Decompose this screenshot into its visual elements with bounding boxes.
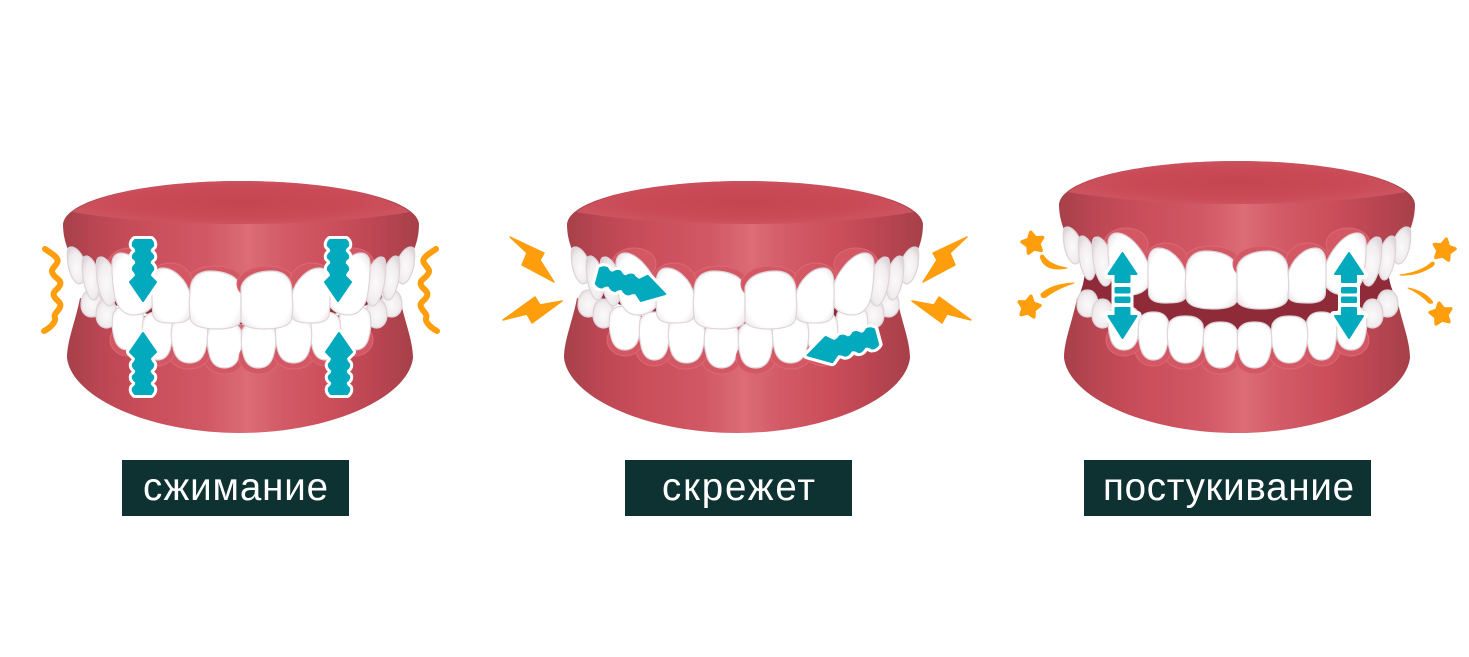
icon: bolt lower left <box>503 297 562 323</box>
icon: star lower left <box>1017 294 1041 318</box>
lower teeth <box>1077 290 1398 374</box>
arrow: up left <box>130 333 156 394</box>
icon: impact strokes <box>1040 255 1434 303</box>
arrow: grinding left <box>804 324 879 368</box>
panel: сжимание <box>44 181 437 516</box>
icon: star lower right <box>1429 301 1453 325</box>
label: сжимание <box>122 460 349 516</box>
icon: star upper right <box>1432 237 1457 261</box>
upper gum <box>63 181 419 298</box>
lower teeth <box>81 290 402 374</box>
arrow: down left <box>130 240 156 301</box>
label: постукивание: постукивание <box>1103 466 1354 509</box>
arrow: up right <box>326 333 352 394</box>
label: скрежет: скрежет <box>662 466 815 509</box>
label: скрежет <box>625 460 852 516</box>
mouth gap <box>100 296 382 320</box>
arrow: down right <box>325 240 351 301</box>
arrow: grinding right <box>595 263 669 307</box>
lower teeth <box>578 290 899 374</box>
lower gum <box>67 298 413 433</box>
upper gum <box>567 181 923 298</box>
icon: bolt upper right <box>923 237 967 282</box>
panel: постукивание <box>1017 161 1457 516</box>
arrow: double left <box>1108 253 1138 338</box>
label: сжимание: сжимание <box>143 466 328 509</box>
upper teeth <box>1063 227 1411 309</box>
lower gum <box>1064 298 1410 433</box>
upper teeth <box>67 247 415 329</box>
icon: star upper left <box>1020 230 1045 254</box>
upper gum <box>1059 161 1415 278</box>
icon: bolt lower right <box>912 297 971 323</box>
icon: vibration left <box>44 249 60 331</box>
upper teeth <box>571 247 919 329</box>
mouth gap <box>592 290 892 319</box>
lower gum <box>564 298 910 433</box>
open mouth <box>1078 258 1396 335</box>
icon: bolt upper left <box>510 237 554 282</box>
icon: vibration right <box>421 249 437 331</box>
panel: скрежет <box>503 181 971 516</box>
label: постукивание <box>1084 460 1371 516</box>
arrow: double right <box>1334 253 1364 338</box>
